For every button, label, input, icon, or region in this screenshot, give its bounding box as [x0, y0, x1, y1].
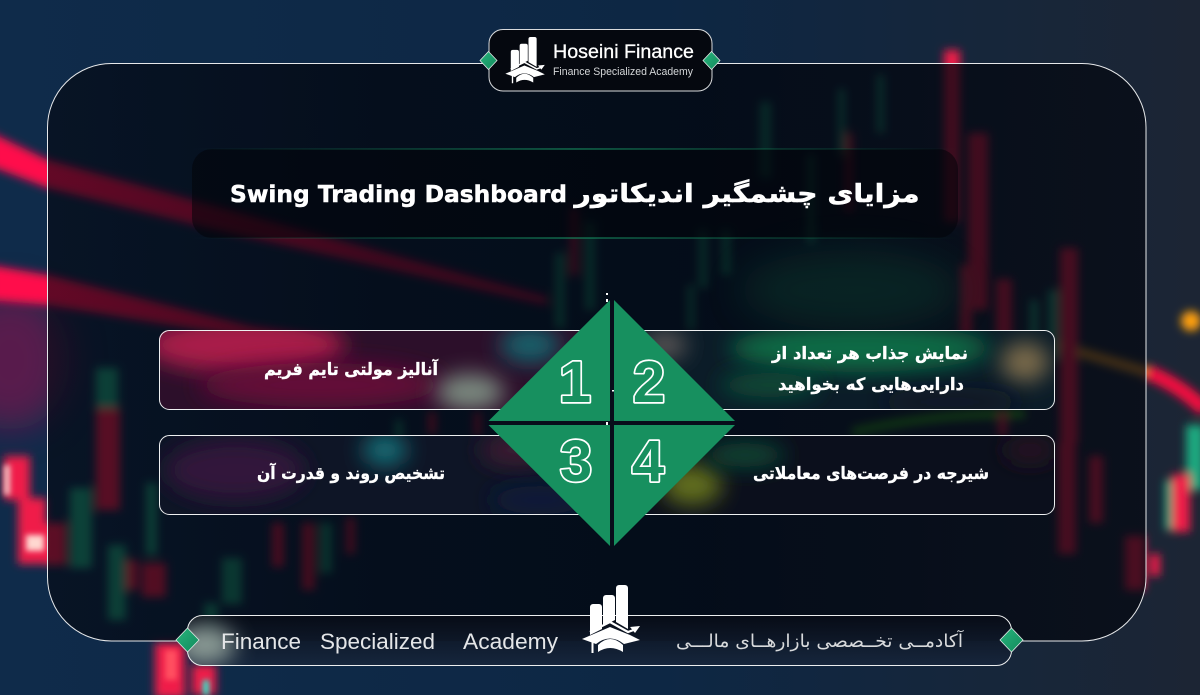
card 2 text: دارایی‌هایی که بخواهید [778, 375, 964, 395]
quadrant 2 [614, 300, 735, 421]
card 2: attractive display of assets [644, 330, 1055, 410]
card 4: dive into trading opportunities [610, 435, 1056, 515]
quadrant 2: 2 [633, 350, 665, 415]
main panel [48, 64, 1146, 641]
bar persian text: آکادمــی تخــصصی بازارهــای مالـــی [676, 629, 964, 652]
brand tagline: Finance Specialized Academy [553, 66, 693, 78]
title text [230, 179, 920, 209]
title box [192, 148, 958, 238]
card 3: trend and strength [159, 434, 620, 515]
center diamond [488, 293, 735, 546]
card 1: multi time frame [159, 330, 580, 410]
card 3 text: تشخیص روند و قدرت آن [257, 462, 445, 484]
bar diamond right [1000, 628, 1023, 652]
title text: Swing Trading Dashboard [230, 182, 567, 208]
bottom bar [175, 615, 1012, 666]
bar english text [221, 629, 559, 654]
card 4 text: شیرجه در فرصت‌های معاملاتی [753, 464, 989, 484]
quadrant 1 [488, 300, 610, 421]
bar english text: Academy [463, 629, 559, 654]
quadrant 4: 4 [632, 429, 664, 494]
badge diamond left [480, 52, 497, 70]
quadrant 4 [614, 425, 735, 546]
logo icon [505, 37, 545, 83]
card 2 text [771, 344, 968, 395]
title text: مزایای چشمگیر اندیکاتور [572, 179, 920, 209]
bar english text: Specialized [320, 629, 435, 654]
brand name: Hoseini Finance [553, 41, 694, 63]
card 2 text: نمایش جذاب هر تعداد از [771, 344, 968, 364]
bottom logo icon [582, 585, 640, 653]
badge diamond right [703, 52, 720, 70]
top logo badge [480, 30, 712, 91]
quadrant 3: 3 [560, 429, 592, 494]
quadrant 1: 1 [559, 350, 591, 415]
bar diamond left [176, 628, 199, 652]
bar english text: Finance [221, 629, 301, 654]
card 1 text: آنالیز مولتی تایم فریم [264, 358, 439, 380]
quadrant 3 [488, 425, 610, 546]
